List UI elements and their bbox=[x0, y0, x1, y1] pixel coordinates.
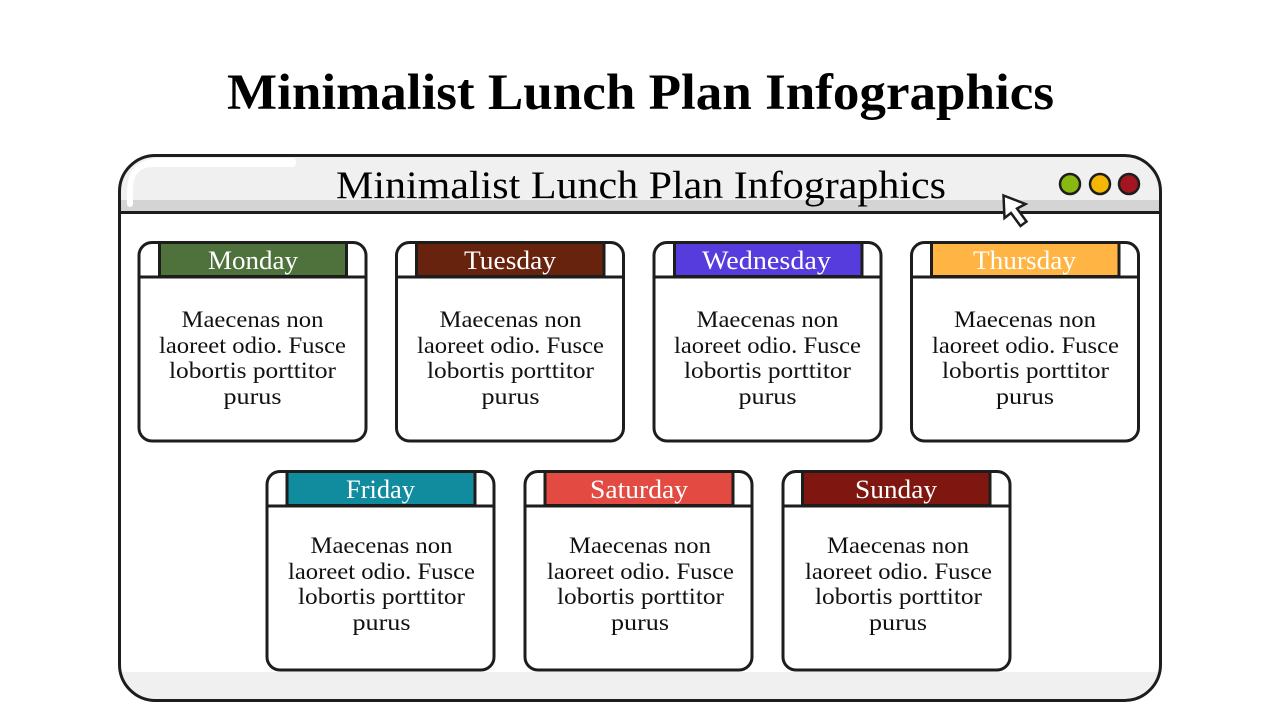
heading: Monday: Monday bbox=[208, 246, 298, 275]
text block: Tuesday: laoreet odio. Fusce bbox=[417, 333, 604, 359]
text block: Tuesday bbox=[417, 307, 604, 410]
text block: Monday: Maecenas non bbox=[182, 307, 324, 333]
text block: Friday: purus bbox=[352, 610, 410, 636]
panel: Tuesday bbox=[396, 242, 624, 441]
text block: Saturday: Maecenas non bbox=[569, 533, 711, 559]
heading: Sunday: Sunday bbox=[855, 475, 937, 504]
text block: Sunday: Maecenas non bbox=[827, 533, 969, 559]
text block: Saturday: lobortis porttitor bbox=[557, 584, 724, 610]
text block: Thursday bbox=[932, 307, 1119, 410]
text block: Friday bbox=[288, 533, 475, 636]
text block: Wednesday: Maecenas non bbox=[696, 307, 839, 333]
text block: Wednesday bbox=[674, 307, 861, 410]
panel: Wednesday bbox=[654, 242, 881, 441]
icon: green window button bbox=[1060, 174, 1080, 194]
text block: Wednesday: laoreet odio. Fusce bbox=[674, 333, 861, 359]
text block: Saturday bbox=[547, 533, 734, 636]
text block: Sunday bbox=[805, 533, 992, 636]
panel: Thursday bbox=[912, 242, 1138, 441]
text block: Saturday: laoreet odio. Fusce bbox=[547, 559, 734, 585]
heading: Thursday: Thursday bbox=[973, 246, 1076, 275]
text block: Monday bbox=[159, 307, 346, 410]
heading: Friday: Friday bbox=[346, 475, 415, 504]
panel: Monday bbox=[139, 242, 366, 441]
window footer band bbox=[120, 664, 1160, 701]
panel: browser window bbox=[120, 156, 1160, 701]
text block: Tuesday: Maecenas non bbox=[440, 307, 582, 333]
text block: Saturday: purus bbox=[611, 610, 669, 636]
text block: Thursday: Maecenas non bbox=[954, 307, 1096, 333]
icon: yellow window button bbox=[1090, 174, 1110, 194]
window title bar bbox=[120, 156, 1160, 212]
text block: Thursday: purus bbox=[996, 384, 1054, 410]
icon: mouse cursor bbox=[1004, 196, 1026, 226]
title: Minimalist Lunch Plan Infographics bbox=[227, 65, 1054, 121]
text block: Thursday: lobortis porttitor bbox=[942, 358, 1109, 384]
text block: Friday: laoreet odio. Fusce bbox=[288, 559, 475, 585]
text block: Monday: lobortis porttitor bbox=[169, 358, 336, 384]
text block: Monday: laoreet odio. Fusce bbox=[159, 333, 346, 359]
icon: red window button bbox=[1119, 174, 1139, 194]
text block: Friday: lobortis porttitor bbox=[298, 584, 465, 610]
text block: Monday: purus bbox=[224, 384, 282, 410]
text block: Tuesday: purus bbox=[482, 384, 540, 410]
text block: Tuesday: lobortis porttitor bbox=[427, 358, 594, 384]
heading: Saturday: Saturday bbox=[590, 475, 688, 504]
text block: Thursday: laoreet odio. Fusce bbox=[932, 333, 1119, 359]
panel: Friday bbox=[267, 472, 494, 670]
heading: Tuesday: Tuesday bbox=[464, 246, 556, 275]
heading: Wednesday: Wednesday bbox=[702, 246, 831, 275]
text block: Wednesday: lobortis porttitor bbox=[684, 358, 851, 384]
text block: Sunday: purus bbox=[869, 610, 927, 636]
panel: Sunday bbox=[783, 472, 1010, 670]
text block: Friday: Maecenas non bbox=[310, 533, 453, 559]
window background bbox=[120, 156, 1160, 700]
text block: Wednesday: purus bbox=[738, 384, 796, 410]
window heading: Minimalist Lunch Plan Infographics bbox=[336, 164, 946, 207]
text block: Sunday: lobortis porttitor bbox=[815, 584, 982, 610]
window header divider bbox=[120, 211, 1160, 214]
panel: Saturday bbox=[525, 472, 752, 670]
text block: Sunday: laoreet odio. Fusce bbox=[805, 559, 992, 585]
window outline bbox=[120, 156, 1160, 700]
